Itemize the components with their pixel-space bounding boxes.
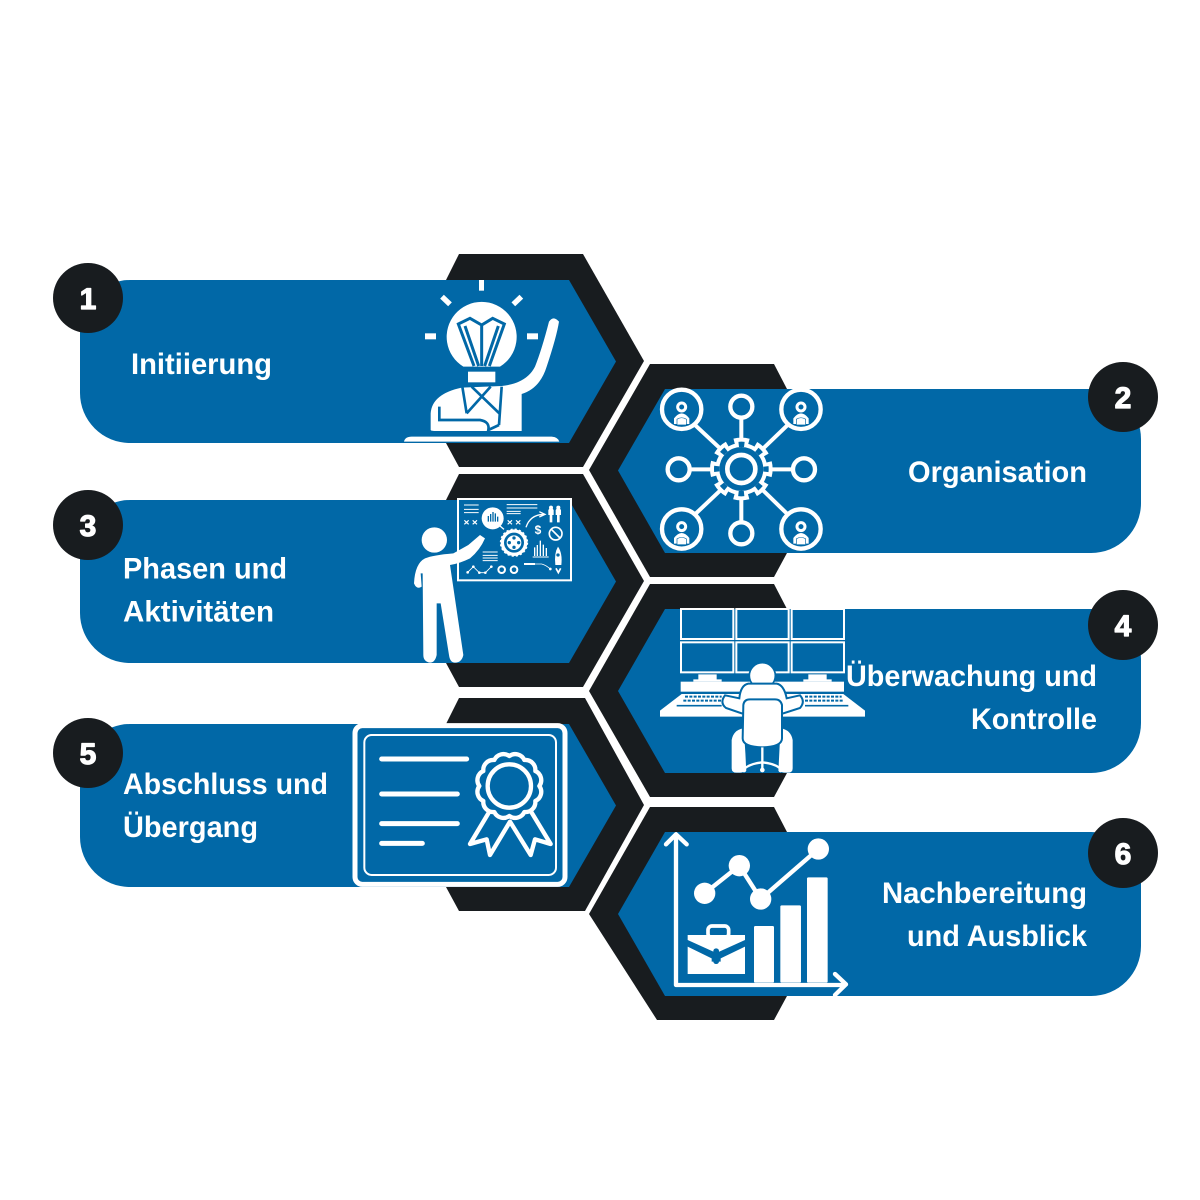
blue bar 3 — [80, 500, 616, 663]
label: Nachbereitung und Ausblick: und Ausblick — [907, 920, 1087, 953]
label: Nachbereitung und Ausblick: Nachbereitung — [882, 877, 1087, 910]
badge 2 — [1088, 362, 1158, 432]
hexagon frame 4 — [589, 584, 787, 797]
label: Nachbereitung und Ausblick — [882, 877, 1087, 953]
label: Organisation: Organisation — [908, 456, 1087, 489]
badge 1 — [53, 263, 123, 333]
hexagon frame 1 — [446, 254, 644, 467]
icon: growth chart with briefcase — [666, 834, 846, 995]
label: Phasen und Aktivitäten: Aktivitäten — [123, 596, 274, 628]
panel: step 6 Nachbereitung und Ausblick — [589, 807, 1158, 1020]
badge 3: 3 — [80, 510, 96, 543]
panel: step 5 Abschluss und Übergang — [53, 698, 644, 911]
label: Überwachung und Kontrolle: Überwachung und — [846, 660, 1097, 693]
label: Phasen und Aktivitäten — [123, 552, 287, 628]
panel: step 2 Organisation — [589, 360, 1158, 577]
badge 6: 6 — [1115, 838, 1131, 871]
badge 5: 5 — [80, 738, 96, 771]
blue bar 5 — [80, 724, 616, 887]
blue bar 4 — [618, 609, 1141, 773]
hexagon frame 6 — [589, 807, 787, 1020]
label: Überwachung und Kontrolle — [846, 660, 1097, 736]
badge 4: 4 — [1115, 610, 1132, 643]
badge 2: 2 — [1115, 382, 1131, 415]
badge 3 — [53, 490, 123, 560]
hexagon frame 2 — [589, 364, 787, 577]
icon: presenter at dashboard: $ — [535, 523, 542, 537]
icon: certificate with rosette — [355, 726, 565, 884]
label: Abschluss und Übergang — [123, 768, 328, 844]
icon: gear network — [662, 360, 821, 549]
icon: presenter at dashboard — [414, 499, 571, 663]
badge 6 — [1088, 818, 1158, 888]
badge 1: 1 — [80, 283, 96, 316]
blue bar 2 — [618, 389, 1141, 553]
panel: step 3 Phasen und Aktivitäten — [53, 474, 644, 687]
blue bar 1 — [80, 280, 616, 443]
label: Abschluss und Übergang: Abschluss und — [123, 768, 328, 801]
icon: person with light bulb — [404, 280, 559, 442]
panel: step 1 Initiierung — [53, 254, 644, 467]
label: Abschluss und Übergang: Übergang — [123, 811, 258, 844]
hexagon frame 5 — [446, 698, 644, 911]
label: Phasen und Aktivitäten: Phasen und — [123, 552, 287, 586]
badge 4 — [1088, 590, 1158, 660]
chair side blocks — [732, 728, 793, 773]
icon: control room operator — [660, 609, 865, 773]
label: Initiierung: Initiierung — [131, 348, 272, 381]
label: Überwachung und Kontrolle: Kontrolle — [971, 703, 1097, 736]
panel: step 4 Überwachung und Kontrolle — [589, 584, 1158, 797]
hexagon frame 3 — [446, 474, 644, 687]
badge 5 — [53, 718, 123, 788]
blue bar 6 — [618, 832, 1141, 996]
